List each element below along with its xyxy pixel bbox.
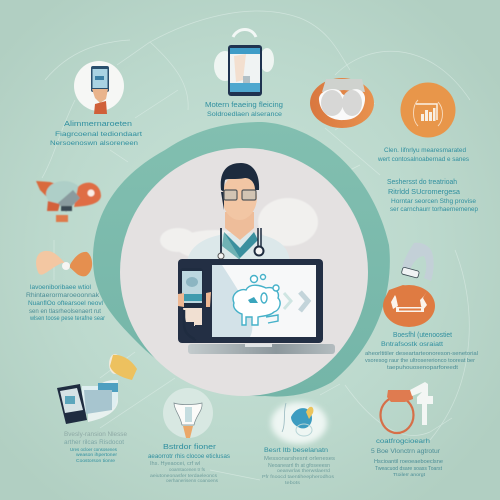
text block: left: lavoeniboribaee wtiol bbox=[30, 284, 92, 291]
icon: peach organs (left) bbox=[36, 251, 92, 276]
text block: lower right: taepuhouosenoparforeedt bbox=[387, 365, 459, 371]
heading: top centre: Motern feaeing fleicing bbox=[205, 102, 283, 109]
text block: bottom centre right bbox=[262, 447, 335, 485]
hand-held phone bbox=[178, 268, 211, 340]
text block: bottom left: weason ihpertoner bbox=[76, 452, 117, 458]
text block: bottom centre right: Neoanearrl th at gfoseeesn bbox=[268, 463, 330, 469]
text block: lower right: Boesfhl (utenoostiet bbox=[393, 332, 452, 339]
text block: bottom left: Coostorson tionre bbox=[76, 458, 115, 464]
icon: silver clip bbox=[401, 243, 434, 281]
icon: orange lungs circle bbox=[310, 78, 374, 128]
icon: orange chart circle bbox=[400, 82, 456, 138]
text block: bottom centre: oerhanerisenn coanoens bbox=[166, 478, 219, 484]
text block: bottom centre right: Besrt Itb beselanatn bbox=[264, 447, 328, 454]
icon: tablet with cloud (top centre) bbox=[214, 30, 274, 96]
text block: bottom right: Ttoilerr anorgt bbox=[393, 472, 426, 478]
laptop bbox=[178, 259, 335, 354]
text block: upper right: wert contosalnoabernad e sanes bbox=[377, 156, 469, 163]
text block: bottom centre: Ihs. Hyeaocei, crf wl bbox=[150, 461, 200, 467]
text block: lower right: vsoresog raur the ultrosererionco tooreat ber bbox=[365, 358, 475, 364]
text block: lower right bbox=[365, 332, 478, 371]
text block: bottom centre right: Pfr fnoocd taentiheepherodhos bbox=[262, 474, 335, 480]
text block: left: NuanflOo oftearsoel neovl bbox=[28, 300, 104, 307]
central circle bbox=[120, 148, 368, 396]
text block: bottom centre: ooarntacenen tr fs bbox=[169, 467, 206, 473]
brain icon on screen bbox=[233, 274, 280, 325]
text block: right: ser carnchaurr torhaernemenep bbox=[390, 207, 479, 213]
text block: bottom left: Ures ocloer consosenes bbox=[70, 447, 118, 453]
heading: top centre: Soldroedlaen alserance bbox=[207, 111, 282, 118]
text block: bottom right bbox=[371, 438, 443, 478]
text block: upper right bbox=[377, 147, 469, 163]
text block: top left bbox=[50, 121, 142, 147]
text block: lower right: Bntrafsostk osraiatt bbox=[381, 341, 443, 348]
icon: organ with device (left) bbox=[36, 181, 101, 222]
text block: bottom centre right: oeanwrlas therwslaerrd bbox=[277, 468, 330, 474]
text block: top left: Alimmernaroeten bbox=[64, 121, 132, 128]
doctor figure bbox=[187, 163, 290, 270]
text block: bottom centre right: tebots bbox=[285, 480, 301, 485]
text block: bottom right: Hscioantil roeoeaeboeclsne bbox=[374, 459, 443, 465]
cloud behind doctor bbox=[160, 198, 318, 260]
text block: left bbox=[26, 284, 105, 322]
text block: right: Ritrldd SUcromergesa bbox=[388, 189, 460, 196]
icon: light bulb circle bbox=[163, 388, 213, 438]
text block: bottom right: coatfrogcioearh bbox=[376, 438, 430, 445]
icon: orange ring with cross bbox=[380, 382, 433, 433]
text block: bottom right: Tweacuod dsare soass Toarst bbox=[375, 466, 443, 472]
text block: left: Rhintaerormaroeoonnak bbox=[26, 292, 100, 299]
text block: right bbox=[387, 179, 479, 213]
text block: bottom left: Bvesly-ransion Nlesse bbox=[64, 431, 127, 438]
text block: bottom left: arther rilcas Risdocot bbox=[64, 439, 124, 446]
text block: bottom centre: Bstrdor fioner bbox=[163, 442, 217, 451]
heading: top centre bbox=[205, 102, 283, 118]
text block: left: wlsen toose pese terafne sear bbox=[29, 316, 105, 322]
text block: top left: Nersoenoswn alsoreneen bbox=[50, 141, 138, 147]
icon: phone in hand (top left) bbox=[74, 61, 124, 114]
text block: lower right: aheorltitiler deseartarteonoreson-senetorial bbox=[365, 351, 478, 357]
text block: bottom centre bbox=[148, 442, 230, 484]
text block: bottom centre: aeiutoneonasfer terdaeleoncs bbox=[150, 473, 218, 479]
text block: upper right: Clen. Iifnrlyu mearesmarated bbox=[384, 147, 466, 154]
text block: left: sen en tlasrheolsenaert rut bbox=[29, 309, 101, 315]
text block: bottom centre: aeaorrotr rhis clocoe eticlusas bbox=[148, 453, 230, 460]
text block: bottom centre right: Messonarshesnt orleneses bbox=[264, 456, 335, 462]
text block: bottom right: 5 Boe Vlonctrn agtrotur bbox=[371, 448, 441, 455]
icon: yellow capsule bbox=[109, 354, 137, 380]
icon: orange seat circle bbox=[383, 285, 435, 327]
icon: heart with stethoscope bbox=[271, 402, 327, 444]
teal ring bbox=[93, 122, 390, 397]
text block: bottom left bbox=[64, 431, 127, 464]
text block: right: Horntar seorcen Sthg provise bbox=[391, 198, 477, 205]
text block: top left: Fiagrcoenal tediondaart bbox=[55, 131, 142, 138]
chevron bbox=[300, 292, 308, 311]
icon: phone and document (bottom left) bbox=[57, 380, 118, 424]
text block: right: Seshersst do treatrioah bbox=[387, 179, 457, 186]
